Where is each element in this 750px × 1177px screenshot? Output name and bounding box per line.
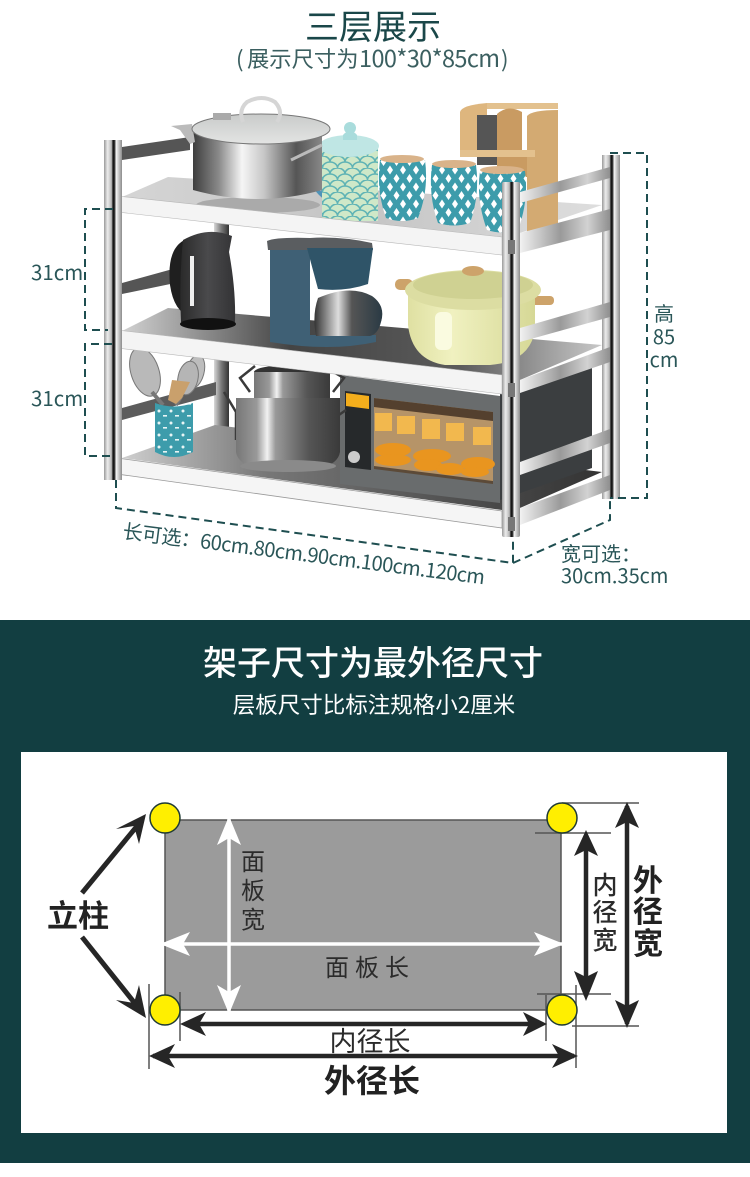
label: height: [650, 298, 678, 373]
icon: yellow post bottom left: [150, 995, 180, 1025]
label: panel width: 宽: [241, 900, 265, 935]
icon: lower stock pot: [224, 365, 346, 472]
label: inner width: 径: [592, 893, 618, 929]
icon: stock pot with lid: [171, 98, 330, 213]
label: inner length: 内径长: [330, 1020, 410, 1059]
arrow: inner width: [574, 830, 598, 1001]
arrow: panel length: [160, 932, 564, 956]
label: outer width: 宽: [633, 919, 663, 963]
icon: pitcher: [303, 122, 379, 221]
title: 三层展示: [305, 0, 441, 49]
label: height: 高: [654, 298, 674, 327]
label: inner width: [592, 866, 618, 957]
middle shelf surface: [122, 308, 602, 380]
label: outer width: 外: [633, 856, 663, 900]
subtitle: 100*30*85cm: [359, 40, 500, 74]
panel background: [0, 620, 750, 1163]
label: width options: 30cm.35cm: [561, 560, 668, 589]
diagram: panel rectangle: [165, 820, 561, 1010]
label: 31cm lower: 31cm: [31, 382, 83, 412]
label: panel width: 板: [241, 871, 265, 906]
panel heading: 架子尺寸为最外径尺寸: [203, 636, 543, 685]
label: outer length: 外径长: [324, 1056, 420, 1102]
icon: yellow post top left: [150, 803, 180, 833]
subtitle: 展示尺寸为: [247, 42, 358, 74]
label: outer width: 径: [633, 887, 663, 931]
icon: microwave side: [500, 368, 592, 500]
label: panel width: 面: [241, 842, 265, 877]
label: height: 85: [653, 321, 675, 350]
icon: yellow casserole: [395, 266, 554, 365]
icon: yellow post top right: [547, 803, 577, 833]
shelf side bands and rails: [520, 167, 610, 525]
panel: dimension explanation: [0, 620, 750, 1163]
label: width options: [561, 538, 668, 589]
icon: patterned canisters: [379, 155, 526, 232]
front posts: [104, 140, 520, 537]
arrow: outer width: [615, 802, 639, 1028]
icon: kettle: [169, 232, 236, 330]
icon: toaster oven: [340, 375, 500, 503]
label: outer width: [633, 856, 663, 963]
bottom shelf surface: [122, 425, 602, 510]
diagram card: [21, 752, 727, 1133]
diagram: tick lines: [149, 803, 639, 1069]
label: panel length: 面板长: [325, 948, 415, 983]
label: inner width: 宽: [592, 921, 618, 957]
label: 31cm upper: 31cm: [31, 256, 83, 286]
subtitle: ): [501, 42, 509, 74]
icon: whisks and utensil cup: [124, 344, 208, 457]
arrow: to top post: [82, 814, 146, 893]
label: panel width: [241, 842, 265, 935]
arrow: panel width: [217, 816, 241, 1014]
top shelf surface: [122, 177, 602, 237]
label: height: cm: [650, 344, 678, 373]
icon: yellow post bottom right: [547, 995, 577, 1025]
panel subheading: 层板尺寸比标注规格小2厘米: [233, 688, 515, 720]
rack with items: [104, 98, 620, 537]
arrow: inner length: [180, 1012, 547, 1036]
back posts and rails: [122, 137, 620, 499]
label: length options: 长可选：60cm.80cm.90cm.100cm.120cm: [121, 515, 487, 590]
label: inner width: 内: [592, 866, 618, 902]
arrow: outer length: [149, 1044, 578, 1068]
shelf front bands: [117, 196, 502, 528]
subtitle: (: [236, 42, 244, 74]
arrow: to bottom post: [82, 937, 146, 1018]
icon: wooden utensil rack: [460, 103, 558, 232]
label: width options: 宽可选：: [561, 538, 641, 567]
dimension lines: [85, 153, 647, 563]
icon: coffee maker: [267, 238, 382, 347]
label: post: 立柱: [47, 891, 109, 936]
